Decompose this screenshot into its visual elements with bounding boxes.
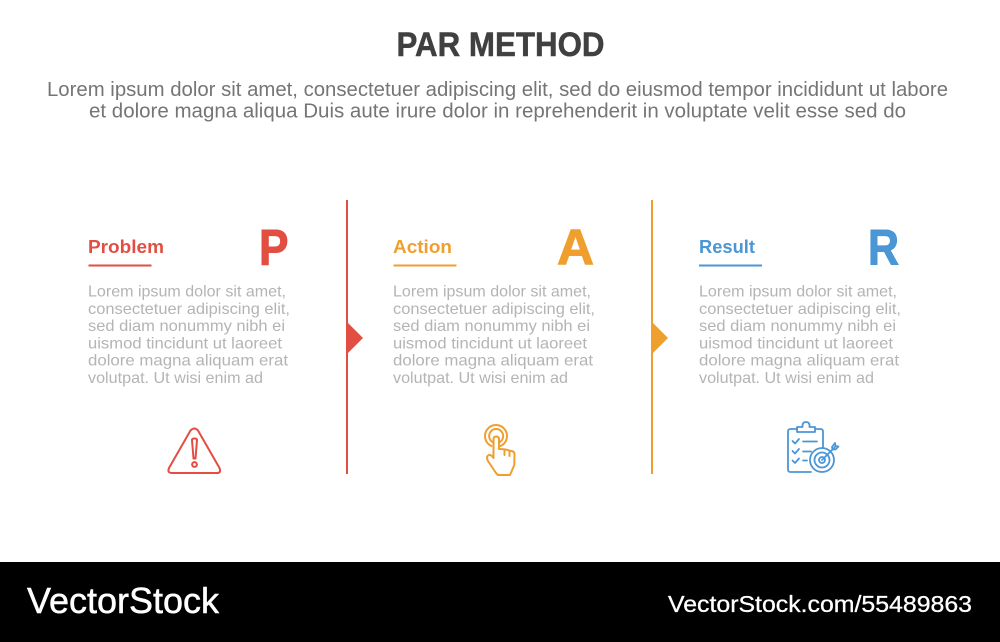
panel: problem — [88, 220, 290, 473]
body text: result: dolore magna aliquam erat — [699, 352, 900, 370]
body text: result: Lorem ipsum dolor sit amet, — [699, 284, 897, 300]
body text: problem: consectetuer adipiscing elit, — [88, 301, 290, 318]
heading: result: Result — [699, 236, 755, 257]
subtitle text — [47, 79, 948, 122]
icon: clipboard and target — [788, 422, 838, 472]
divider arrow: red — [346, 200, 363, 474]
body text: problem — [88, 284, 290, 387]
heading: problem: Problem — [88, 236, 164, 257]
footer bar — [0, 562, 1000, 642]
footer url text: VectorStock.com/55489863 — [668, 591, 972, 617]
body text: result: volutpat. Ut wisi enim ad — [699, 370, 874, 387]
subtitle text: Lorem ipsum dolor sit amet, consectetuer adipiscing elit, sed do eiusmod tempor incididunt ut labore — [47, 79, 948, 101]
panel: result — [699, 220, 901, 472]
body text: action: dolore magna aliquam erat — [393, 352, 594, 370]
divider arrow: orange — [651, 200, 668, 474]
body text: problem: uismod tincidunt ut laoreet — [88, 336, 283, 352]
underline: result — [699, 264, 762, 266]
body text: result: consectetuer adipiscing elit, — [699, 301, 901, 318]
letter P: P — [259, 220, 288, 276]
body text: action: sed diam nonummy nibh ei — [393, 318, 590, 335]
letter R: R — [868, 220, 899, 276]
body text: result: uismod tincidunt ut laoreet — [699, 336, 894, 352]
title: PAR METHOD — [396, 26, 604, 64]
body text: result — [699, 284, 901, 387]
body text: action: uismod tincidunt ut laoreet — [393, 336, 588, 352]
icon: pointing hand — [485, 425, 514, 475]
underline: action — [394, 264, 456, 266]
body text: action: Lorem ipsum dolor sit amet, — [393, 284, 591, 300]
body text: problem: Lorem ipsum dolor sit amet, — [88, 284, 286, 300]
panel: action — [393, 220, 595, 475]
body text: problem: sed diam nonummy nibh ei — [88, 318, 285, 335]
footer logo text: VectorStock — [27, 580, 220, 621]
icon: warning triangle — [168, 428, 220, 473]
body text: problem: volutpat. Ut wisi enim ad — [88, 370, 263, 387]
body text: action: volutpat. Ut wisi enim ad — [393, 370, 568, 387]
letter A: A — [557, 220, 594, 276]
body text: action — [393, 284, 595, 387]
subtitle text: et dolore magna aliqua Duis aute irure dolor in reprehenderit in voluptate velit esse sed do — [89, 100, 906, 122]
underline: problem — [88, 264, 152, 266]
body text: problem: dolore magna aliquam erat — [88, 352, 289, 370]
heading: action: Action — [393, 236, 452, 257]
body text: result: sed diam nonummy nibh ei — [699, 318, 896, 335]
body text: action: consectetuer adipiscing elit, — [393, 301, 595, 318]
